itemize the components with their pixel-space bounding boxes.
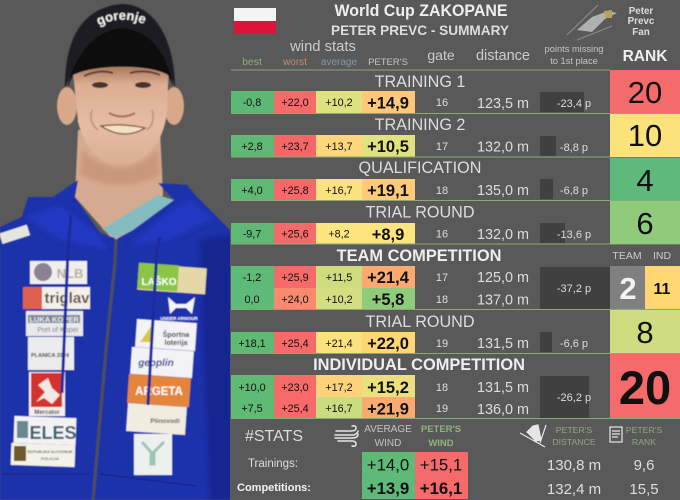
row: team competition: 125,0 m <box>477 270 529 286</box>
row: training 1 <box>231 73 591 113</box>
rank: team competition <box>610 250 680 309</box>
row: individual competition: +10,0 <box>238 382 266 394</box>
row: qualification: +4,0 <box>241 185 263 197</box>
sponsor names: ARGETA <box>135 386 183 398</box>
row: trial round 1: -13,6 p <box>557 229 591 241</box>
row: individual competition: +7,5 <box>241 403 263 415</box>
drawstrings <box>62 215 160 405</box>
sponsor names: loterija <box>165 340 188 347</box>
sponsor names: gorenje <box>96 11 146 28</box>
row: individual competition: +17,2 <box>325 382 353 394</box>
row: training 1: 16 <box>436 97 448 109</box>
icon: wind <box>335 426 358 446</box>
row: team competition: +11,5 <box>326 272 352 284</box>
row: trial round 2: +21,4 <box>325 338 353 350</box>
row: training 2: 17 <box>436 141 448 153</box>
row: training 2: TRAINING 2 <box>375 116 465 134</box>
icon: jumper <box>520 425 546 447</box>
sponsor names: UNDER ARMOUR <box>160 316 198 321</box>
rank: team competition: IND <box>653 250 671 262</box>
sponsor names: Port of Koper <box>37 327 79 334</box>
column headers: PETER'S <box>368 57 408 68</box>
row: qualification <box>231 159 588 200</box>
row labels <box>237 458 311 494</box>
title: World Cup ZAKOPANE <box>334 2 508 20</box>
wind boxes: +15,1 <box>420 456 462 474</box>
row: team competition: +10,2 <box>325 294 353 306</box>
row: qualification: +19,1 <box>367 182 409 200</box>
row: training 1: TRAINING 1 <box>375 73 465 91</box>
divider lines <box>231 70 680 418</box>
sponsor names <box>27 11 198 460</box>
column headers: to 1st place <box>550 56 598 66</box>
column headers <box>242 39 668 68</box>
row: team competition: 137,0 m <box>477 292 529 308</box>
chest patches right <box>137 264 207 294</box>
row: training 2: +23,7 <box>281 141 309 153</box>
rank: training 1 <box>610 70 680 113</box>
sponsor names: Plinovodi <box>150 418 180 425</box>
row: team competition: -1,2 <box>243 272 261 284</box>
sponsor names: LUKA KOPER <box>29 315 79 324</box>
ears <box>57 87 77 125</box>
row: training 1: +22,0 <box>281 97 309 109</box>
column headers: average <box>321 57 358 68</box>
rank: training 1: 20 <box>628 75 662 110</box>
column headers: RANK <box>623 48 668 65</box>
wind headers <box>364 424 461 449</box>
row: qualification: +16,7 <box>325 185 353 197</box>
fan label: Fan <box>632 27 650 38</box>
row: trial round 2: TRIAL ROUND <box>365 313 475 331</box>
wind headers: WIND <box>375 438 401 449</box>
rank: qualification: 4 <box>636 163 654 198</box>
hoodie hem <box>2 474 196 486</box>
row: training 1: +10,2 <box>325 97 353 109</box>
row: individual competition: +25,4 <box>281 403 309 415</box>
row: trial round 2: -6,6 p <box>560 338 588 350</box>
row: qualification: +25,8 <box>281 185 309 197</box>
rank: trial round 2: 8 <box>636 315 654 350</box>
row labels: Trainings: <box>248 458 298 470</box>
sponsor names: Mercator <box>34 410 60 416</box>
face <box>72 66 170 157</box>
body shading <box>199 233 230 500</box>
distance and rank values: 9,6 <box>634 457 654 474</box>
rank: trial round 2 <box>610 310 680 353</box>
stats heading: #STATS <box>245 428 303 445</box>
rank: qualification <box>610 158 680 200</box>
sponsor names: PLANICA 2024 <box>31 353 70 359</box>
distance and rank values: 130,8 m <box>547 457 601 474</box>
distance header: DISTANCE <box>552 437 596 447</box>
distance and rank values: 132,4 m <box>547 481 601 498</box>
wind headers: PETER'S <box>421 424 461 435</box>
cap brim shadow <box>67 28 173 88</box>
rank: trial round 1 <box>610 201 680 244</box>
mouth <box>101 125 145 134</box>
row: training 2: +10,5 <box>367 138 409 156</box>
sponsor names: Športna <box>163 330 189 339</box>
rank header: RANK <box>632 437 656 447</box>
wind boxes: +16,1 <box>420 479 462 498</box>
distance header <box>552 425 596 447</box>
row: individual competition: 131,5 m <box>477 380 529 396</box>
row: trial round 1: +8,9 <box>372 226 404 244</box>
column headers: points missing <box>545 44 603 54</box>
row: team competition: +21,4 <box>367 269 410 287</box>
title <box>331 2 510 38</box>
hood highlights <box>24 200 215 250</box>
row: individual competition: INDIVIDUAL COMPETITION <box>313 356 525 374</box>
row: trial round 1: +25,6 <box>281 228 309 240</box>
row: training 2: +2,8 <box>241 141 263 153</box>
wind boxes <box>362 452 468 499</box>
column headers: distance <box>476 48 530 64</box>
row: trial round 1: TRIAL ROUND <box>365 204 475 222</box>
chest patches left <box>30 261 87 284</box>
rank: trial round 1: 6 <box>636 206 654 241</box>
row: qualification: 18 <box>436 185 448 197</box>
zipper <box>93 240 116 500</box>
rank: training 2: 10 <box>628 118 662 153</box>
fan label: Prevc <box>628 16 655 27</box>
brows <box>84 71 160 76</box>
fan label: Peter <box>629 6 653 17</box>
photo: Peter Prevc in blue hoodie <box>0 4 230 500</box>
row: trial round 1: -9,7 <box>243 228 261 240</box>
row: training 2: -8,8 p <box>560 142 588 154</box>
row: individual competition <box>231 356 591 418</box>
fan label <box>628 6 655 38</box>
row labels: Competitions: <box>237 482 311 494</box>
row: individual competition: +16,7 <box>325 403 353 415</box>
sponsor names: REPUBLIKA SLOVENIJE <box>27 449 73 454</box>
row: trial round 1: 132,0 m <box>477 227 529 243</box>
rank: individual competition <box>610 354 680 418</box>
sponsor names: ELES <box>29 423 77 443</box>
row: trial round 1: +8,2 <box>328 228 350 240</box>
wind boxes: +14,0 <box>367 456 409 474</box>
row: training 1: +14,9 <box>367 94 409 112</box>
row: team competition: +25,9 <box>281 272 309 284</box>
row: trial round 2: +25,4 <box>281 338 309 350</box>
cheek lines <box>91 110 153 130</box>
row: team competition: 0,0 <box>244 294 260 306</box>
column headers: best <box>242 56 262 68</box>
sponsor names: geoplin <box>137 358 174 369</box>
row: trial round 2: 131,5 m <box>477 336 529 352</box>
icon: ski jumper logo <box>567 5 617 40</box>
row: qualification: QUALIFICATION <box>359 159 481 177</box>
row: training 2: +13,7 <box>325 141 353 153</box>
rank header: PETER'S <box>626 425 662 435</box>
row: team competition: -37,2 p <box>557 283 591 295</box>
row: individual competition: 136,0 m <box>477 402 529 418</box>
row: training 1: -23,4 p <box>557 98 591 110</box>
row: trial round 2 <box>231 313 588 353</box>
row: individual competition: +15,2 <box>367 379 409 397</box>
row: individual competition: 18 <box>436 382 448 394</box>
neck shadow <box>80 150 160 185</box>
sponsor names: NLB <box>57 266 83 281</box>
row: individual competition: -26,2 p <box>557 392 591 404</box>
row: training 1: -0,8 <box>243 97 261 109</box>
rank: team competition: 2 <box>619 271 637 306</box>
row: individual competition: 19 <box>436 403 448 415</box>
distance header: PETER'S <box>556 425 592 435</box>
flag: Poland <box>234 8 276 34</box>
row: trial round 2: 19 <box>436 338 448 350</box>
wind headers: WIND <box>428 438 454 449</box>
row: training 1: 123,5 m <box>477 96 529 112</box>
distance and rank values <box>547 457 659 498</box>
white sleeve tag <box>0 225 30 244</box>
sponsor names: POLICIJA <box>41 456 59 461</box>
row: team competition: 17 <box>436 272 448 284</box>
sponsor names: LAŠKO <box>142 275 177 288</box>
column headers: worst <box>282 57 307 68</box>
row: team competition <box>231 247 610 309</box>
cap <box>65 4 175 88</box>
row: team competition: 18 <box>436 294 448 306</box>
row: trial round 1 <box>231 204 591 244</box>
row: trial round 2: +18,1 <box>238 338 266 350</box>
row: team competition: +24,0 <box>281 294 309 306</box>
icon: document <box>610 427 622 442</box>
row: qualification: -6,8 p <box>560 185 588 197</box>
distance and rank values: 15,5 <box>629 481 659 498</box>
t-shirt collar <box>102 195 174 238</box>
rank: team competition: 11 <box>654 281 671 298</box>
sponsor names: triglav <box>44 290 90 307</box>
wind boxes: +13,9 <box>367 479 409 498</box>
rank header <box>626 425 662 447</box>
title: PETER PREVC - SUMMARY <box>331 22 510 38</box>
row: trial round 2: +22,0 <box>367 335 409 353</box>
panel: stats <box>237 424 662 499</box>
eyes <box>92 82 108 88</box>
row: qualification: 135,0 m <box>477 183 529 199</box>
row: individual competition: +21,9 <box>367 400 409 418</box>
row: training 2: 132,0 m <box>477 140 529 156</box>
row: team competition: +5,8 <box>372 291 404 309</box>
row: individual competition: +23,0 <box>281 382 309 394</box>
column headers: wind stats <box>289 39 356 55</box>
column headers: gate <box>427 47 455 63</box>
row: trial round 1: 16 <box>436 228 448 240</box>
neck <box>75 130 163 240</box>
nose shadow <box>109 113 135 116</box>
row: training 2 <box>231 116 588 156</box>
rank: team competition: TEAM <box>612 250 642 262</box>
rank: individual competition: 20 <box>619 361 671 414</box>
row: team competition: TEAM COMPETITION <box>337 247 501 265</box>
rank: training 2 <box>610 114 680 157</box>
hoodie <box>0 180 230 500</box>
wind headers: AVERAGE <box>364 424 412 435</box>
